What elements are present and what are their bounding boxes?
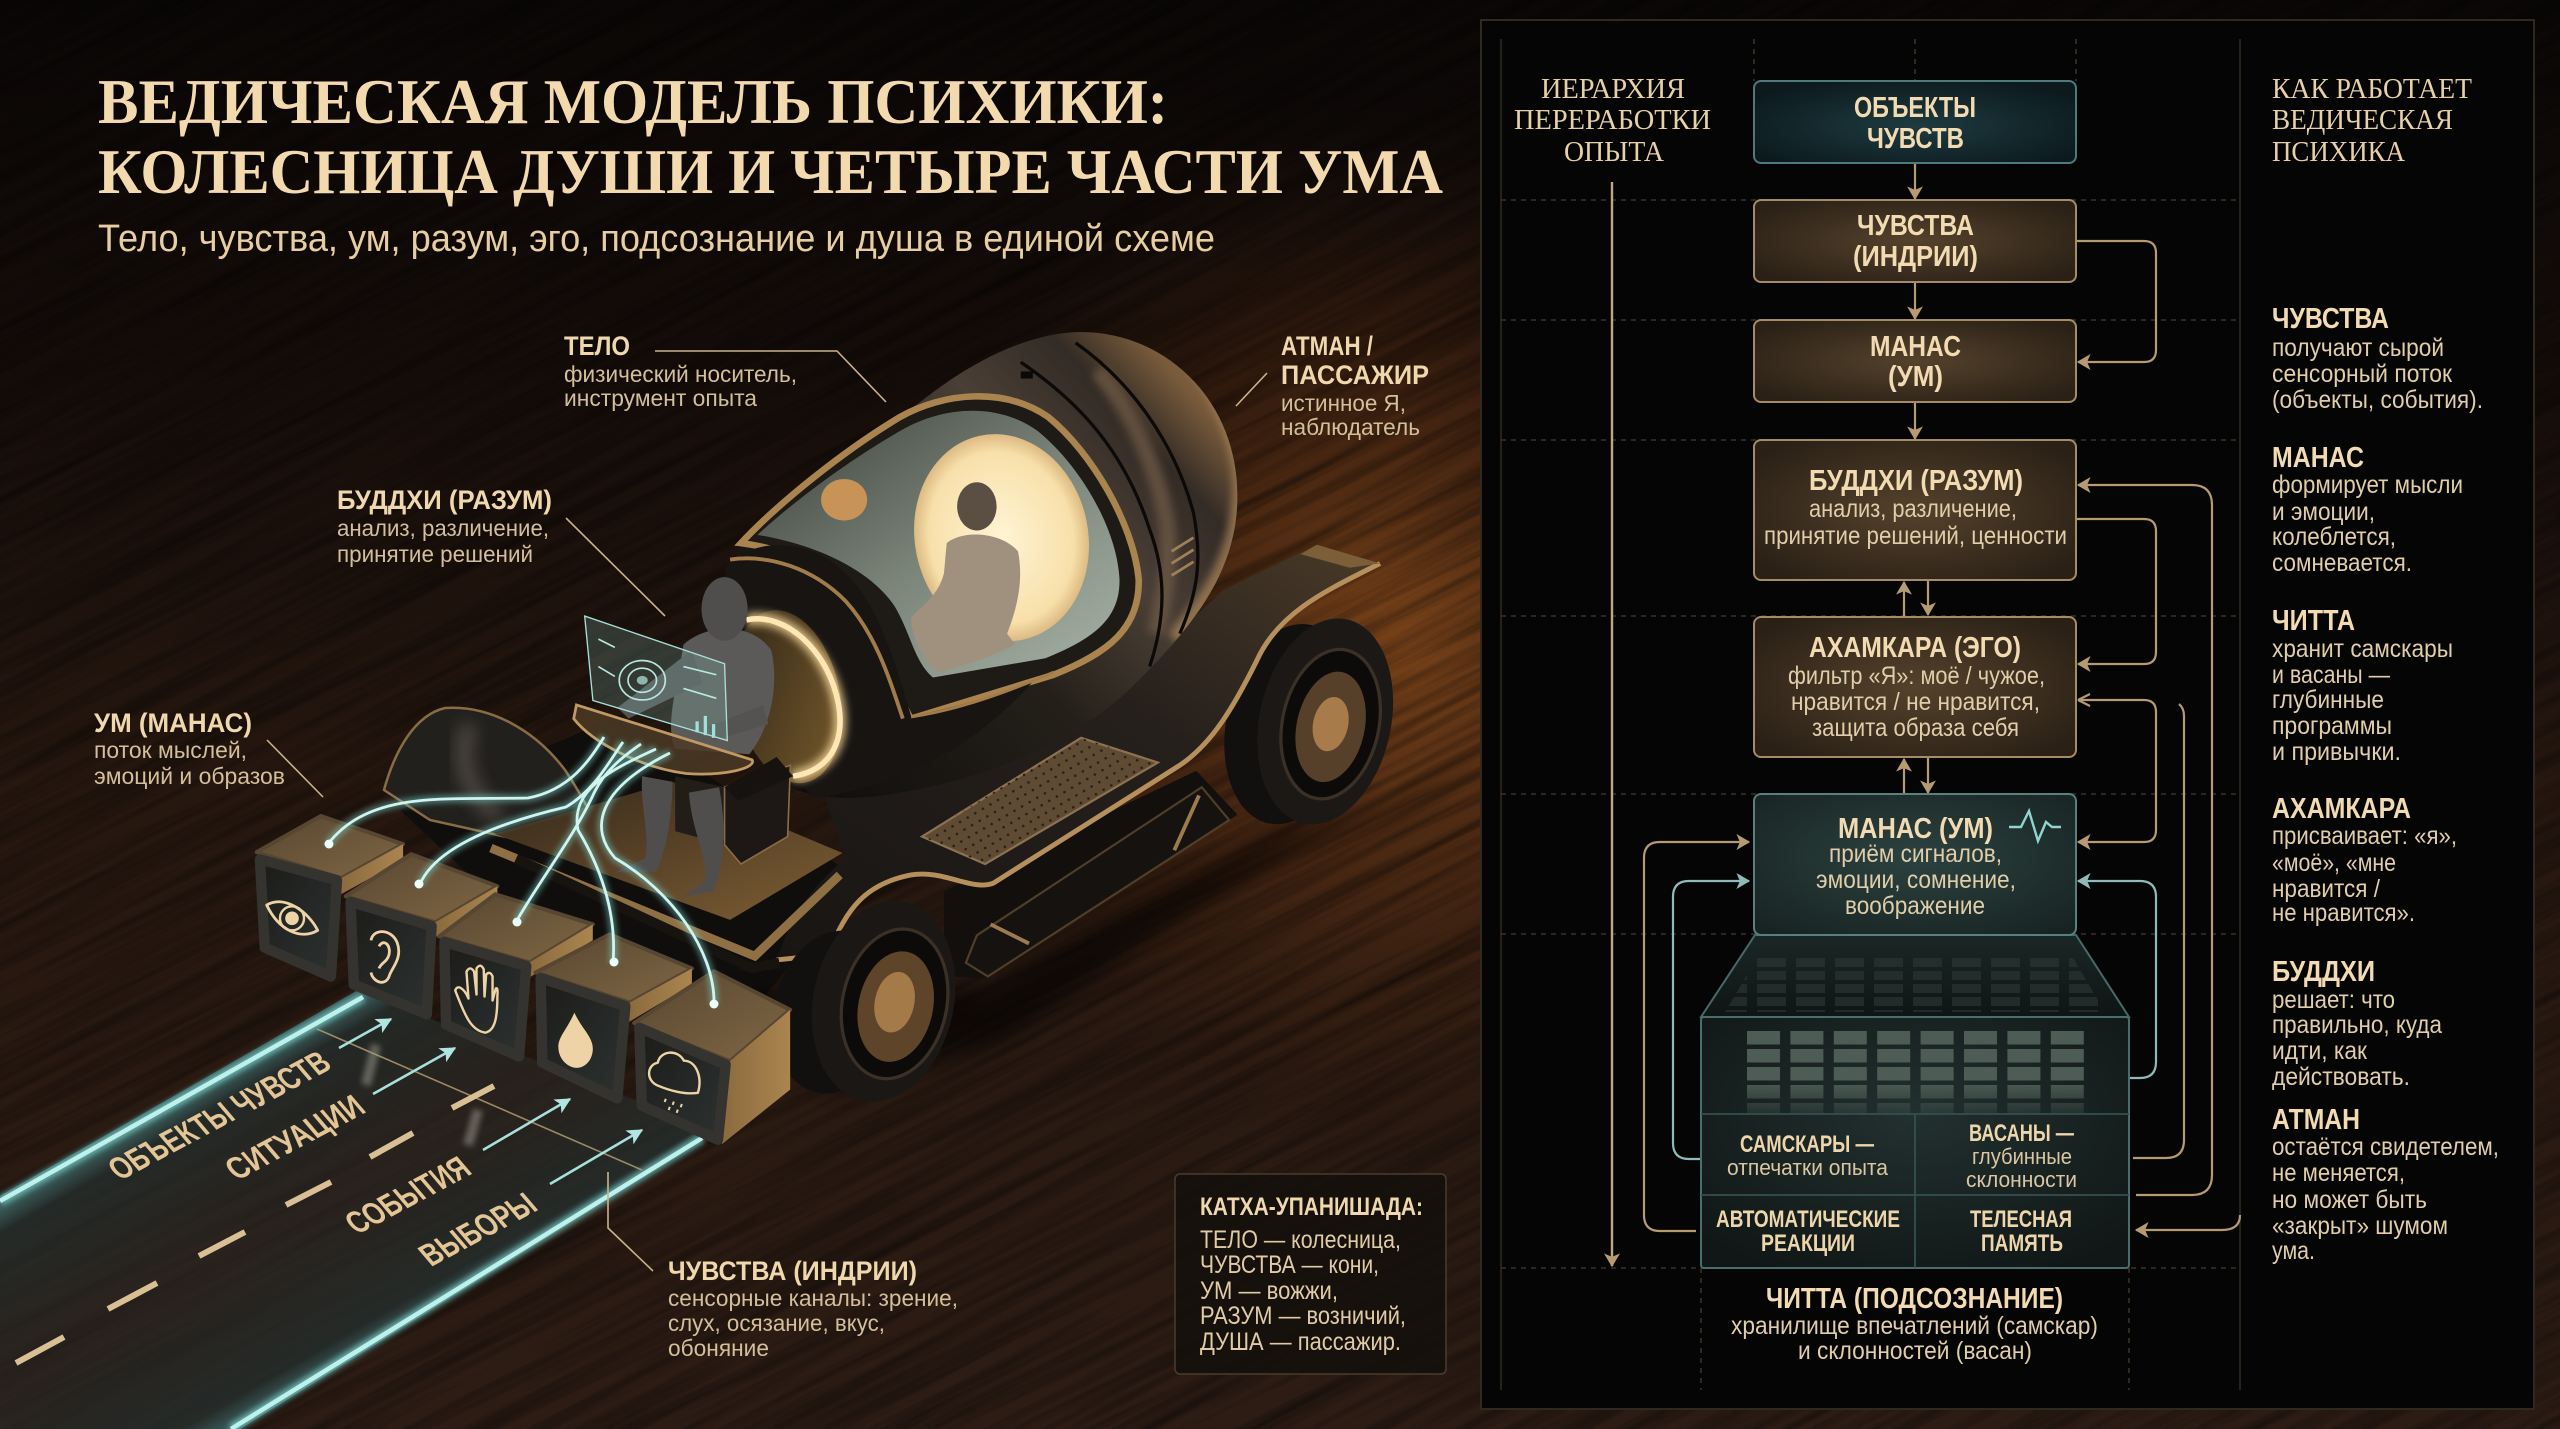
callout: katha upanishad: ДУША — пассажир. [1200,1328,1401,1356]
callout: katha upanishad [1175,1174,1446,1374]
callout: katha upanishad: УМ — вожжи, [1200,1277,1338,1305]
label: manas [94,708,323,797]
sense cubes [257,816,790,1144]
explanation: buddhi: решает: что [2272,986,2395,1014]
cell: body memory: ТЕЛЕСНАЯ [1970,1206,2072,1233]
glowing portal [718,600,857,793]
cell: samskaras: САМСКАРЫ — [1740,1131,1874,1158]
cube: smell [634,971,790,1144]
cell: body memory: ПАМЯТЬ [1981,1230,2063,1257]
box: manas mind: МАНАС (УМ) [1838,813,1993,845]
cube: taste [535,934,692,1098]
cube: touch [439,894,593,1056]
explanation: atman [2272,1104,2499,1265]
front collar [725,545,1032,798]
label: atman: истинное Я, [1281,390,1406,416]
box: sense objects [1754,81,2076,163]
road labels: СИТУАЦИИ [217,1089,373,1187]
label: body: физический носитель, [564,361,797,387]
box: buddhi [1754,440,2076,580]
explanation: senses: ЧУВСТВА [2272,303,2389,335]
chitta caption: и склонностей (васан) [1798,1337,2032,1365]
road labels: СОБЫТИЯ [337,1150,479,1241]
icon: pulse [2009,811,2061,841]
explanation: chitta: глубинные [2272,686,2384,714]
chariot [491,332,1411,1115]
explanation: atman: АТМАН [2272,1104,2360,1136]
box: manas: МАНАС [1870,331,1961,363]
explanation: buddhi: идти, как [2272,1037,2368,1065]
explanation: senses: получают сырой [2272,334,2444,362]
explanation: senses [2272,303,2483,414]
box: buddhi: принятие решений, ценности [1764,522,2067,550]
callout: katha upanishad: КАТХА-УПАНИШАДА: [1200,1193,1423,1221]
sensory fibres to the mind [324,737,718,1008]
passenger figure [911,482,1020,672]
label: atman: АТМАН / [1281,331,1373,361]
vertical hierarchy arrow [1611,182,1613,1266]
label: buddhi [337,485,665,616]
label: indriyas: обоняние [668,1335,769,1361]
cell: vasanas: ВАСАНЫ — [1969,1120,2074,1147]
cell: vasanas: глубинные [1972,1144,2072,1169]
side rail [966,787,1229,976]
label: indriyas: ЧУВСТВА (ИНДРИИ) [668,1256,917,1286]
cube: sight [257,816,403,976]
road lane dashes [16,1086,494,1363]
road labels: ОБЪЕКТЫ ЧУВСТВ [100,1045,339,1187]
chitta caption: хранилище впечатлений (самскар) [1731,1312,2098,1340]
right column heading: ПСИХИКА [2272,136,2405,168]
box: manas [1754,320,2076,402]
explanation: buddhi: БУДДХИ [2272,956,2375,988]
explanation: manas: сомневается. [2272,549,2412,577]
road labels [100,1045,545,1273]
cell: samskaras: отпечатки опыта [1727,1155,1889,1180]
label: indriyas [608,1172,958,1361]
subtitle: Тело, чувства, ум, разум, эго, подсознание и душа в единой схеме [98,218,1215,260]
explanation: senses: сенсорный поток [2272,360,2453,388]
explanation: atman: ума. [2272,1237,2315,1265]
right column heading: ВЕДИЧЕСКАЯ [2272,104,2453,136]
driver figure (mind/buddhi) [615,577,774,897]
title: КОЛЕСНИЦА ДУШИ И ЧЕТЫРЕ ЧАСТИ УМА [98,136,1443,207]
explanation: buddhi [2272,956,2442,1091]
label: manas: УМ (МАНАС) [94,708,252,738]
callout: katha upanishad: ТЕЛО — колесница, [1200,1226,1401,1254]
label: buddhi: принятие решений [337,541,533,567]
box: manas mind: эмоции, сомнение, [1816,866,2016,894]
explanation: buddhi: правильно, куда [2272,1011,2442,1039]
chitta caption [1731,1283,2098,1365]
box: ahamkara [1754,617,2076,757]
amber lamp [821,479,867,521]
label: atman: наблюдатель [1281,414,1420,440]
label: body: ТЕЛО [564,331,630,361]
footplate [922,738,1158,864]
label: body [564,331,886,411]
right column heading: КАК РАБОТАЕТ [2272,73,2472,105]
label: manas: поток мыслей, [94,737,247,763]
explanation: manas: формирует мысли [2272,471,2463,499]
chassis body [777,545,1380,978]
explanation: chitta: программы [2272,712,2392,740]
cell: samskaras [1727,1131,1889,1180]
explanation: atman: «закрыт» шумом [2272,1212,2448,1240]
explanation: manas: МАНАС [2272,442,2364,474]
explanation: senses: (объекты, события). [2272,386,2483,414]
label: atman: ПАССАЖИР [1281,360,1429,390]
label: indriyas: сенсорные каналы: зрение, [668,1285,958,1311]
window frame and glass [741,396,1139,719]
cell: body memory [1970,1206,2072,1257]
box: ahamkara: нравится / не нравится, [1791,688,2040,716]
explanation: chitta: и васаны — [2272,661,2390,689]
explanation: chitta: и привычки. [2272,738,2401,766]
ground shadow [725,793,1372,1089]
callout: katha upanishad: ЧУВСТВА — кони, [1200,1251,1379,1279]
seat plate [491,782,842,968]
label: buddhi: анализ, различение, [337,515,549,541]
box: buddhi: анализ, различение, [1809,495,2017,523]
box: senses: ЧУВСТВА [1857,210,1974,242]
front wheel [758,887,973,1115]
explanation: ahamkara: не нравится». [2272,899,2415,927]
explanation: chitta: хранит самскары [2272,635,2453,663]
explanation: atman: но может быть [2272,1186,2427,1214]
box: senses: (ИНДРИИ) [1853,241,1978,273]
explanation: manas: и эмоции, [2272,498,2375,526]
explanation: buddhi: действовать. [2272,1063,2410,1091]
front hood of chariot [384,708,860,1020]
box: ahamkara: защита образа себя [1812,714,2019,742]
flow arrows [1644,163,2240,1231]
explanation: chitta [2272,605,2453,766]
explanation: ahamkara: АХАМКАРА [2272,793,2411,825]
rear wheel [1207,606,1411,837]
box: manas mind: приём сигналов, [1829,840,2002,868]
left column heading: ИЕРАРХИЯ [1541,73,1685,105]
label: indriyas: слух, осязание, вкус, [668,1310,885,1336]
road of sense objects [0,990,716,1429]
cube: hearing [346,854,497,1014]
road labels: ВЫБОРЫ [411,1187,545,1273]
chitta storage block [1701,935,2129,1268]
holographic panel [585,616,727,741]
driver seat [675,757,793,864]
box: manas: (УМ) [1888,361,1943,393]
grid lines [1501,39,2240,1390]
box: sense objects: ЧУВСТВ [1867,123,1964,155]
left column heading: ПЕРЕРАБОТКИ [1514,104,1711,136]
explanation: manas: колеблется, [2272,523,2396,551]
cell: automatic reactions: АВТОМАТИЧЕСКИЕ [1716,1206,1900,1233]
box: manas mind: воображение [1845,892,1985,920]
label: manas: эмоций и образов [94,763,285,789]
road arrows [339,1019,642,1184]
title: ВЕДИЧЕСКАЯ МОДЕЛЬ ПСИХИКИ: [98,66,1168,137]
chitta caption: ЧИТТА (ПОДСОЗНАНИЕ) [1766,1283,2063,1315]
inner light disc [895,418,1108,658]
panel: processing hierarchy [1481,20,2534,1409]
left column heading [1514,73,1711,168]
title [98,66,1443,207]
box: senses [1754,200,2076,282]
explanation: manas [2272,442,2463,577]
explanation: ahamkara: присваивает: «я», [2272,822,2457,850]
cell: automatic reactions [1716,1206,1900,1257]
control desk [574,705,753,774]
box: buddhi: БУДДХИ (РАЗУМ) [1809,465,2023,497]
label: buddhi: БУДДХИ (РАЗУМ) [337,485,552,515]
cell: vasanas [1966,1120,2077,1192]
explanation: chitta: ЧИТТА [2272,605,2355,637]
explanation: ahamkara: «моё», «мне [2272,849,2396,877]
box: ahamkara: фильтр «Я»: моё / чужое, [1788,662,2045,690]
box: manas mind [1754,794,2076,935]
explanation: ahamkara: нравится / [2272,875,2380,903]
right column heading [2272,73,2472,168]
box: ahamkara: АХАМКАРА (ЭГО) [1809,632,2021,664]
left column heading: ОПЫТА [1564,136,1664,168]
label: body: инструмент опыта [564,385,757,411]
explanation: atman: не меняется, [2272,1159,2405,1187]
capsule [718,332,1241,798]
label: atman [1236,331,1429,440]
explanation: ahamkara [2272,793,2457,927]
cell: automatic reactions: РЕАКЦИИ [1761,1230,1855,1257]
explanation: atman: остаётся свидетелем, [2272,1133,2499,1161]
cell: vasanas: склонности [1966,1167,2077,1192]
box: sense objects: ОБЪЕКТЫ [1854,92,1976,124]
callout: katha upanishad: РАЗУМ — возничий, [1200,1302,1406,1330]
